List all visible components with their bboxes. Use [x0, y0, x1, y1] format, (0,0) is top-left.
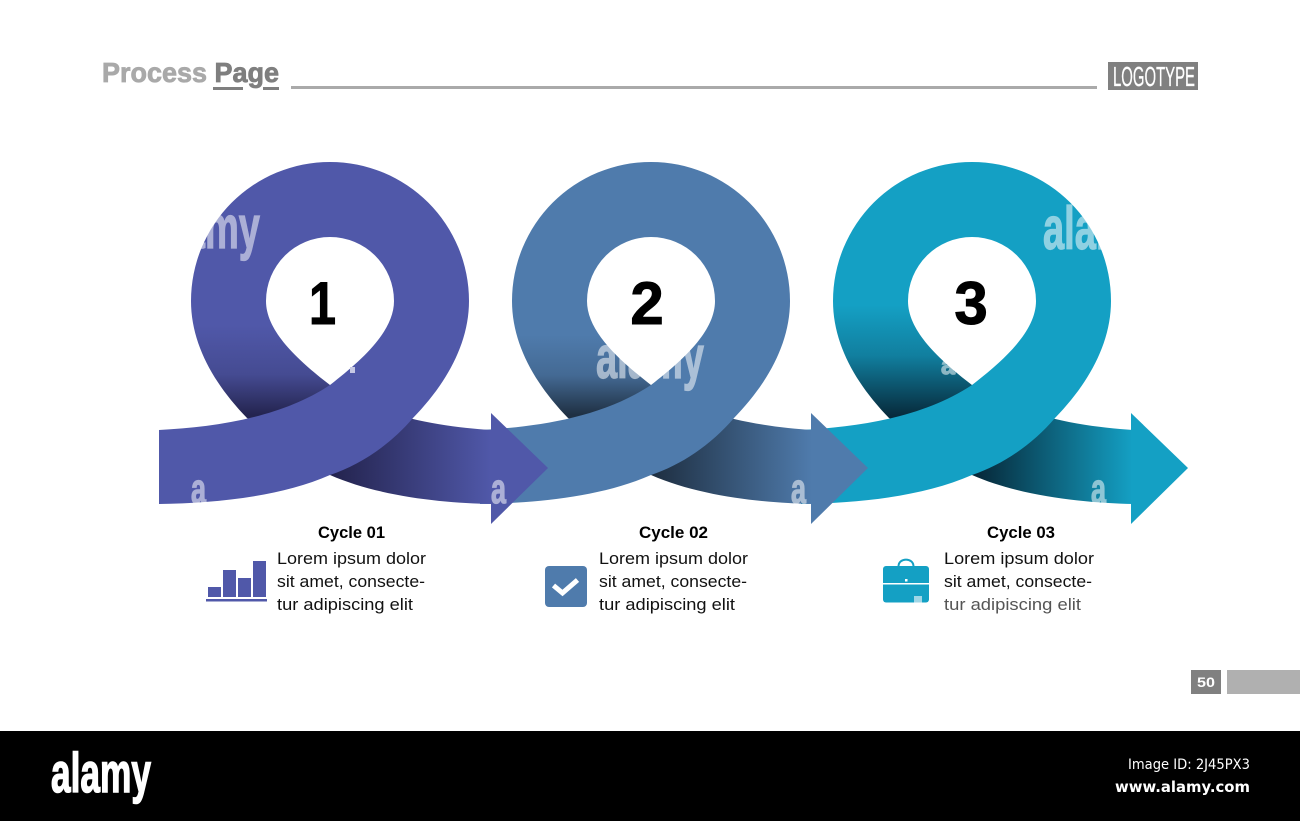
- cycle 1 loop arrow: [159, 162, 548, 524]
- tail section: [330, 385, 491, 504]
- loop back section: [833, 301, 972, 465]
- website: www.alamy.com: [1115, 778, 1250, 796]
- front ribbon and ring: [159, 162, 469, 504]
- body text: cycle 01: Lorem ipsum dolor: [277, 549, 426, 568]
- arrow head: [491, 413, 548, 524]
- stock watermarks: a: [191, 465, 206, 512]
- icon: check box: [545, 566, 587, 607]
- loop back section: [512, 301, 651, 465]
- stock watermarks: a: [941, 350, 956, 380]
- body text: cycle 02: tur adipiscing elit: [599, 595, 735, 614]
- panel: cycle 02: [545, 523, 748, 614]
- panel: cycle 03: [883, 523, 1094, 614]
- number 3: 3: [954, 270, 988, 337]
- page number badge: [1191, 670, 1221, 694]
- footer logo: alamy: alamy: [51, 741, 151, 804]
- heading: cycle 02: Cycle 02: [639, 523, 708, 542]
- body text: cycle 01: [277, 549, 426, 614]
- image id: Image ID: 2J45PX3: [1128, 757, 1250, 773]
- cycle 2 loop arrow: [480, 162, 868, 524]
- stock watermarks: alamy: [1043, 195, 1151, 262]
- number 2: 2: [630, 270, 664, 337]
- page number badge: 50: [1197, 674, 1215, 690]
- body text: cycle 03: tur adipiscing elit: [944, 595, 1081, 614]
- loop back section: [191, 301, 330, 465]
- arrow head: [811, 413, 868, 524]
- body text: cycle 01: tur adipiscing elit: [277, 595, 413, 614]
- title underline: [213, 87, 279, 90]
- panel: cycle 01: [206, 523, 426, 614]
- front ribbon and ring: [801, 162, 1111, 504]
- icon: briefcase: [883, 560, 929, 602]
- title: Process Page: Process Page: [102, 57, 279, 88]
- stock watermarks: a: [1091, 465, 1106, 512]
- logotype badge: [1108, 61, 1198, 92]
- header rule: [291, 86, 1097, 89]
- body text: cycle 03: sit amet, consecte-: [944, 572, 1092, 591]
- body text: cycle 02: sit amet, consecte-: [599, 572, 747, 591]
- footer band: [0, 731, 1300, 821]
- body text: cycle 02: Lorem ipsum dolor: [599, 549, 748, 568]
- header: [102, 57, 1198, 92]
- stock watermarks: a: [491, 465, 506, 512]
- stock watermarks: a: [791, 465, 806, 512]
- stock watermark fragment: [350, 367, 355, 373]
- icon: bar chart: [206, 561, 267, 602]
- tail section: [651, 385, 812, 504]
- logotype badge: LOGOTYPE: [1113, 61, 1195, 92]
- heading: cycle 01: Cycle 01: [318, 523, 385, 542]
- stock watermarks: [152, 194, 1151, 512]
- cycle 3 loop arrow: [801, 162, 1188, 524]
- body text: cycle 02: [599, 549, 748, 614]
- page number bar: [1227, 670, 1300, 694]
- stock watermarks: alamy: [152, 194, 260, 261]
- stock watermarks: alamy: [596, 324, 704, 391]
- body text: cycle 03: Lorem ipsum dolor: [944, 549, 1094, 568]
- tail section: [972, 385, 1133, 504]
- number 1: 1: [309, 270, 336, 337]
- heading: cycle 03: Cycle 03: [987, 523, 1055, 542]
- body text: cycle 01: sit amet, consecte-: [277, 572, 425, 591]
- body text: cycle 03: [944, 549, 1094, 614]
- arrow head: [1131, 413, 1188, 524]
- front ribbon and ring: [480, 162, 790, 504]
